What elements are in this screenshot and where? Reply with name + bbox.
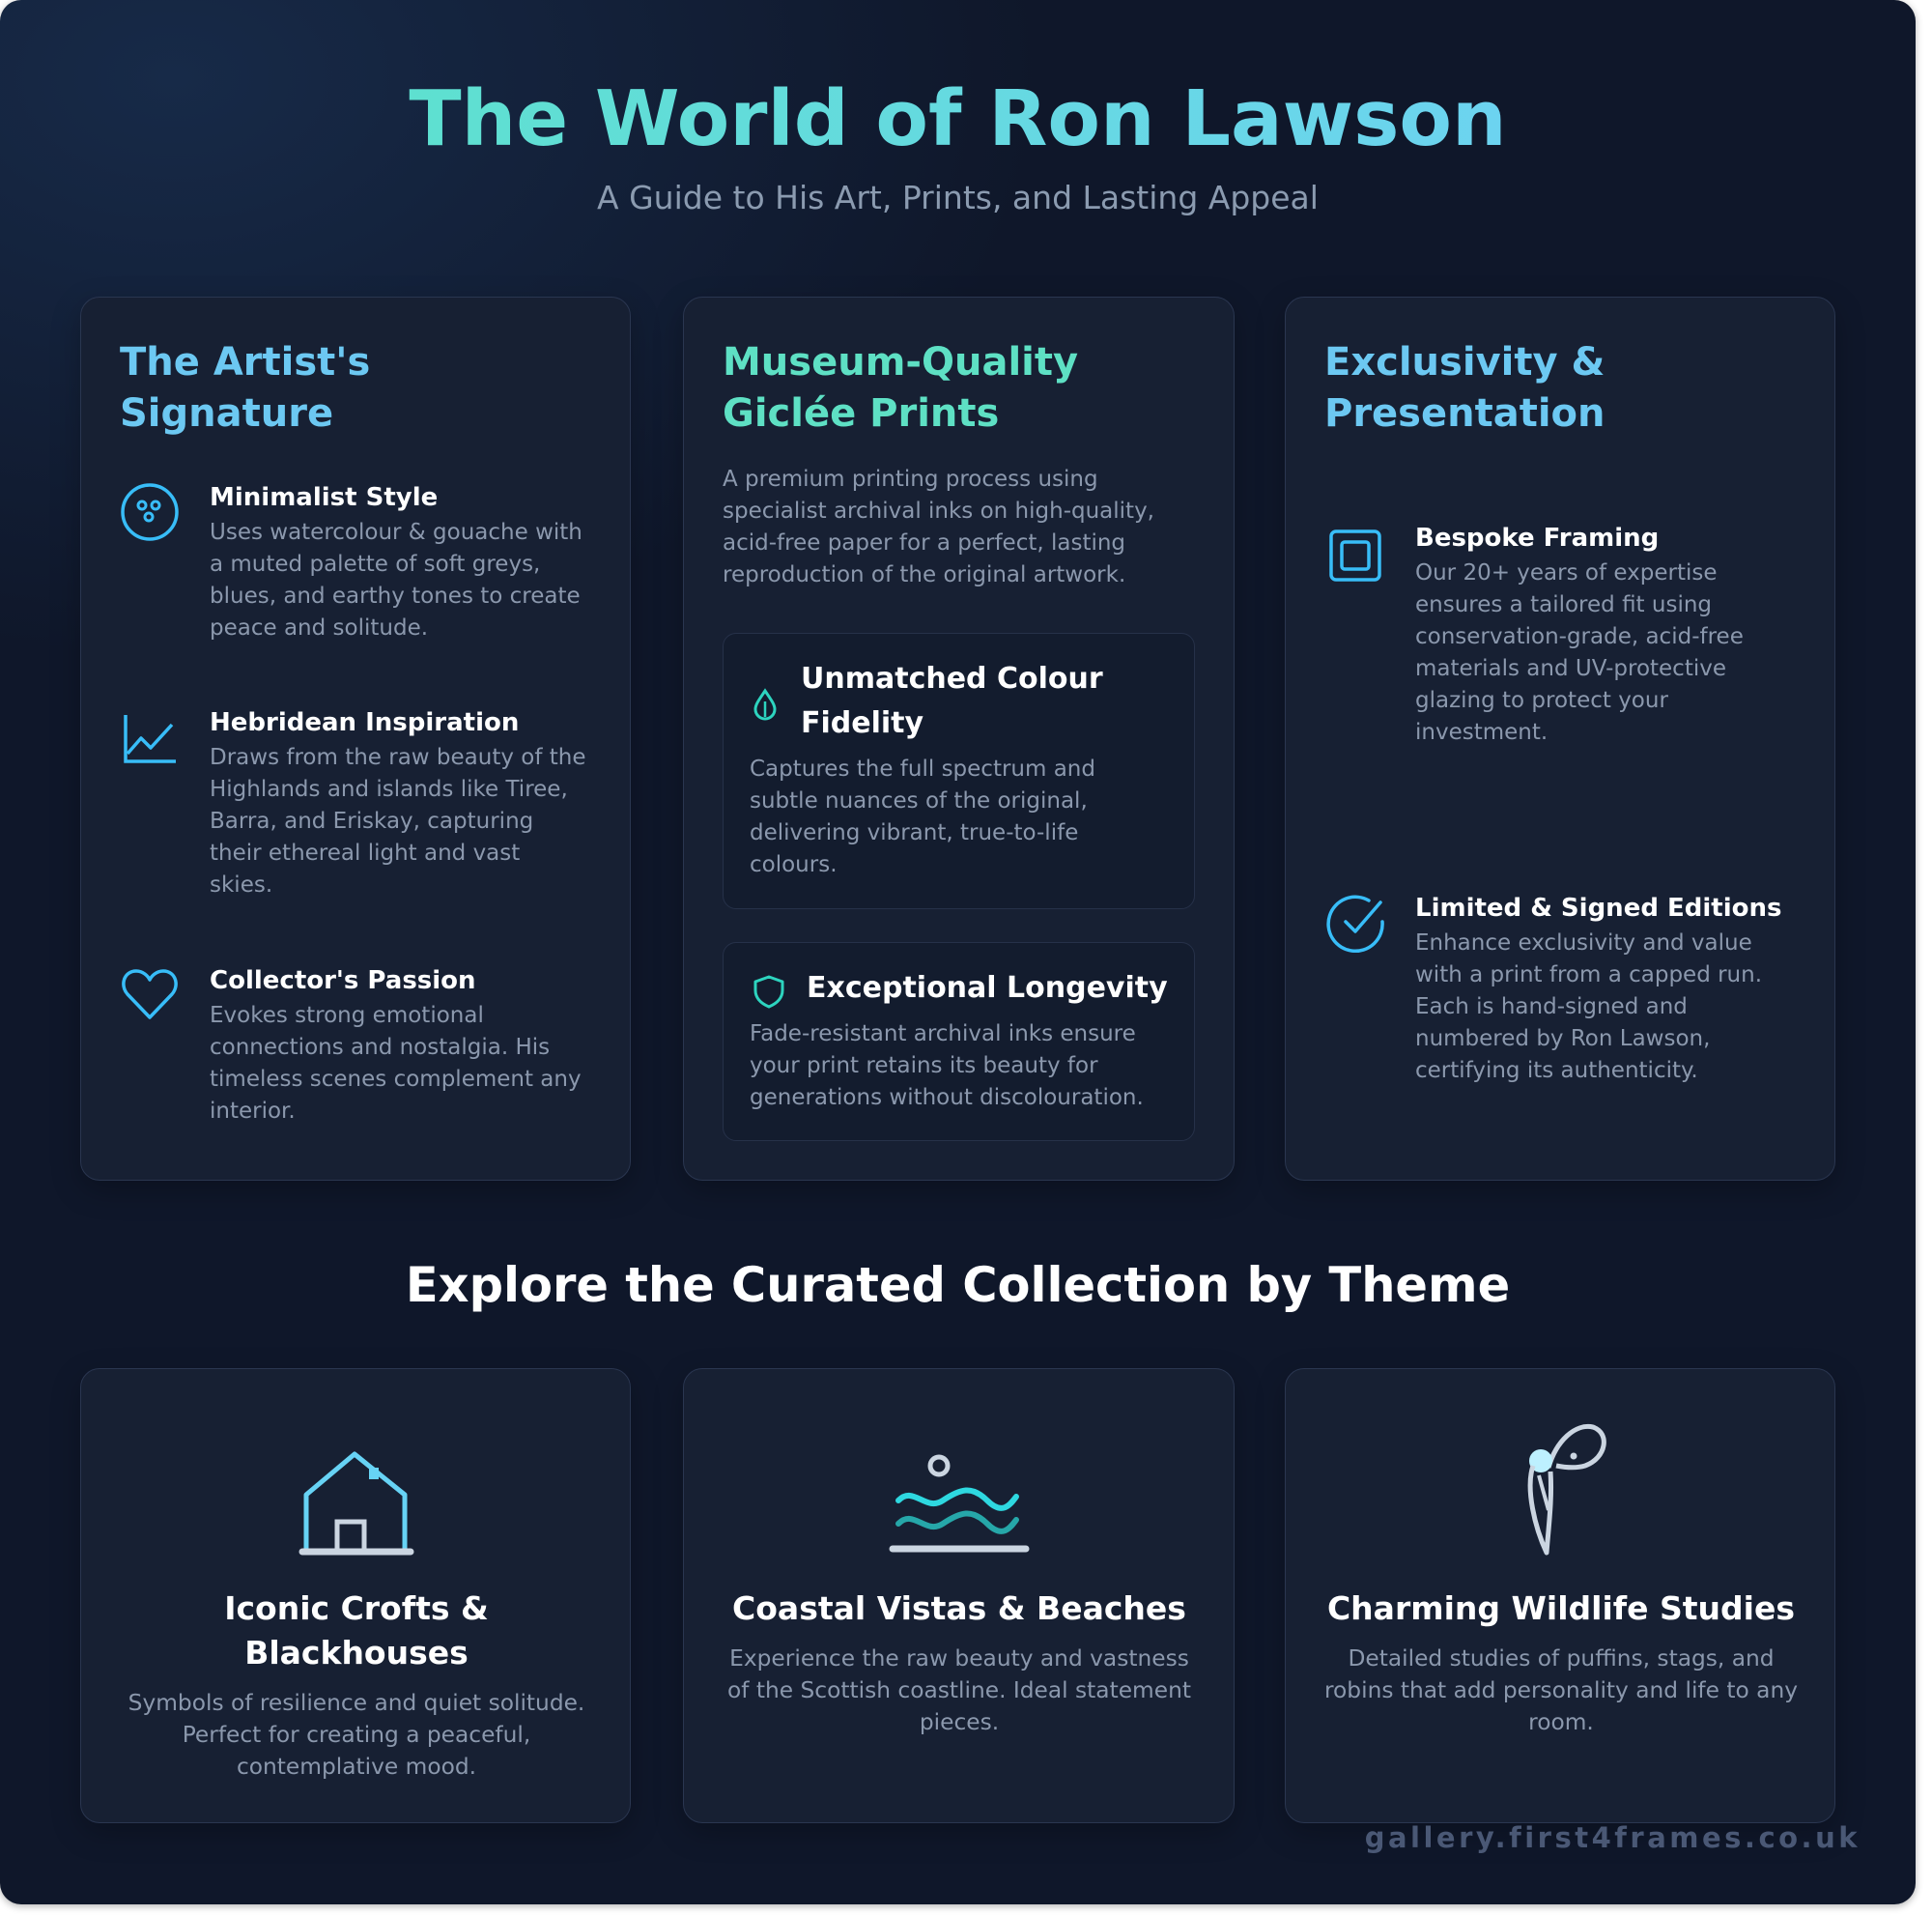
sub-card: longevity — [723, 942, 1195, 1141]
item title: Limited & Signed Editions — [1415, 894, 1781, 923]
item description: certifying its authenticity. — [1415, 1058, 1698, 1083]
item description: a muted palette of soft greys, — [210, 552, 540, 577]
heading: Signature — [120, 391, 333, 436]
panel: giclee prints — [683, 297, 1235, 1181]
intro text: reproduction of the original artwork. — [723, 562, 1125, 587]
item description: their ethereal light and vast — [210, 841, 520, 866]
sub-card title: Fidelity — [801, 706, 923, 740]
item title: Minimalist Style — [210, 483, 438, 512]
item: minimalist style — [121, 483, 582, 641]
footer url: gallery.first4frames.co.uk — [1365, 1821, 1861, 1854]
title: The World of Ron Lawson — [409, 73, 1507, 163]
item description: Uses watercolour & gouache with — [210, 520, 582, 545]
sub-card title — [801, 662, 1103, 740]
sub-card description: delivering vibrant, true-to-life — [750, 820, 1078, 845]
sub-card description — [750, 757, 1095, 877]
card description: Symbols of resilience and quiet solitude. — [128, 1690, 584, 1716]
item description: Each is hand-signed and — [1415, 994, 1688, 1019]
item description: Draws from the raw beauty of the — [210, 745, 586, 770]
item description: Evokes strong emotional — [210, 1003, 484, 1028]
item description: Highlands and islands like Tiree, — [210, 777, 568, 802]
sub-card description: Fade-resistant archival inks ensure — [750, 1021, 1136, 1046]
item description: peace and solitude. — [210, 615, 428, 641]
heading: Presentation — [1324, 391, 1605, 436]
sub-card description: Captures the full spectrum and — [750, 757, 1095, 782]
item description: connections and nostalgia. His — [210, 1035, 550, 1060]
card description: Detailed studies of puffins, stags, and — [1348, 1645, 1775, 1672]
item description — [210, 1003, 582, 1124]
item description: with a print from a capped run. — [1415, 962, 1762, 987]
icon: drop — [753, 688, 777, 721]
card description — [1324, 1645, 1798, 1735]
icon: heart — [122, 969, 178, 1019]
item description: blues, and earthy tones to create — [210, 584, 581, 609]
item description: numbered by Ron Lawson, — [1415, 1026, 1710, 1051]
panel: artist's signature — [80, 297, 631, 1181]
heading: Giclée Prints — [723, 391, 999, 436]
item description: conservation-grade, acid-free — [1415, 624, 1744, 649]
card description — [128, 1690, 584, 1780]
icon: shield — [753, 976, 784, 1009]
card description: pieces. — [920, 1709, 999, 1735]
card description: contemplative mood. — [237, 1754, 476, 1780]
item: collector's passion — [122, 966, 582, 1124]
item title: Bespoke Framing — [1415, 524, 1659, 553]
icon: frame — [1329, 529, 1381, 582]
icon: waves — [889, 1455, 1030, 1552]
item title: Collector's Passion — [210, 966, 476, 995]
item description: interior. — [210, 1099, 296, 1124]
heading: The Artist's — [120, 340, 370, 385]
card title: Iconic Crofts & — [224, 1589, 489, 1627]
sub-card description: subtle nuances of the original, — [750, 788, 1088, 814]
item description: Barra, and Eriskay, capturing — [210, 809, 533, 834]
card title: Blackhouses — [244, 1634, 469, 1672]
card description — [727, 1645, 1191, 1735]
item: limited editions — [1326, 894, 1781, 1083]
intro text: acid-free paper for a perfect, lasting — [723, 530, 1125, 556]
card title: Coastal Vistas & Beaches — [732, 1589, 1186, 1627]
card description: Perfect for creating a peaceful, — [183, 1722, 530, 1748]
heading — [723, 340, 1078, 436]
sub-card description: colours. — [750, 852, 838, 877]
item description: materials and UV-protective — [1415, 656, 1726, 681]
sub-card title: Unmatched Colour — [801, 662, 1103, 696]
card description: Experience the raw beauty and vastness — [729, 1645, 1189, 1672]
item: bespoke framing — [1329, 524, 1744, 745]
item title: Hebridean Inspiration — [210, 708, 519, 737]
card: wildlife — [1285, 1368, 1835, 1823]
heading: Exclusivity & — [1324, 340, 1605, 385]
card: coastal — [683, 1368, 1235, 1823]
item description: Our 20+ years of expertise — [1415, 560, 1718, 586]
card description: room. — [1528, 1709, 1594, 1735]
item description — [1415, 930, 1762, 1083]
sub-card title: Exceptional Longevity — [807, 971, 1168, 1005]
panel: exclusivity — [1285, 297, 1835, 1181]
card description: of the Scottish coastline. Ideal statement — [727, 1677, 1191, 1703]
heading — [120, 340, 370, 436]
card: crofts — [80, 1368, 631, 1823]
item description: skies. — [210, 872, 272, 898]
icon: bird — [1528, 1424, 1606, 1556]
heading: Museum-Quality — [723, 340, 1078, 385]
icon: check circle — [1326, 895, 1384, 953]
heading — [1324, 340, 1605, 436]
item description: timeless scenes complement any — [210, 1067, 582, 1092]
item description — [210, 745, 586, 898]
section heading: Explore the Curated Collection by Theme — [406, 1257, 1510, 1313]
item description: investment. — [1415, 720, 1548, 745]
intro text: A premium printing process using — [723, 467, 1098, 492]
sub-card description: generations without discolouration. — [750, 1085, 1144, 1110]
item description — [1415, 560, 1744, 745]
item description: ensures a tailored fit using — [1415, 592, 1712, 617]
subtitle: A Guide to His Art, Prints, and Lasting Appeal — [597, 179, 1319, 216]
sub-card: colour fidelity — [723, 633, 1195, 909]
item description — [210, 520, 582, 641]
sub-card description: your print retains its beauty for — [750, 1053, 1098, 1078]
icon: house — [299, 1451, 413, 1556]
card title: Charming Wildlife Studies — [1327, 1589, 1795, 1627]
icon: chart line — [124, 715, 176, 763]
item description: Enhance exclusivity and value — [1415, 930, 1752, 956]
item: hebridean inspiration — [124, 708, 586, 898]
card title — [224, 1589, 489, 1672]
icon: palette — [121, 483, 179, 541]
card description: robins that add personality and life to any — [1324, 1677, 1798, 1703]
item description: glazing to protect your — [1415, 688, 1668, 713]
intro text: specialist archival inks on high-quality, — [723, 499, 1154, 524]
intro text — [723, 467, 1154, 587]
sub-card description — [750, 1021, 1144, 1110]
